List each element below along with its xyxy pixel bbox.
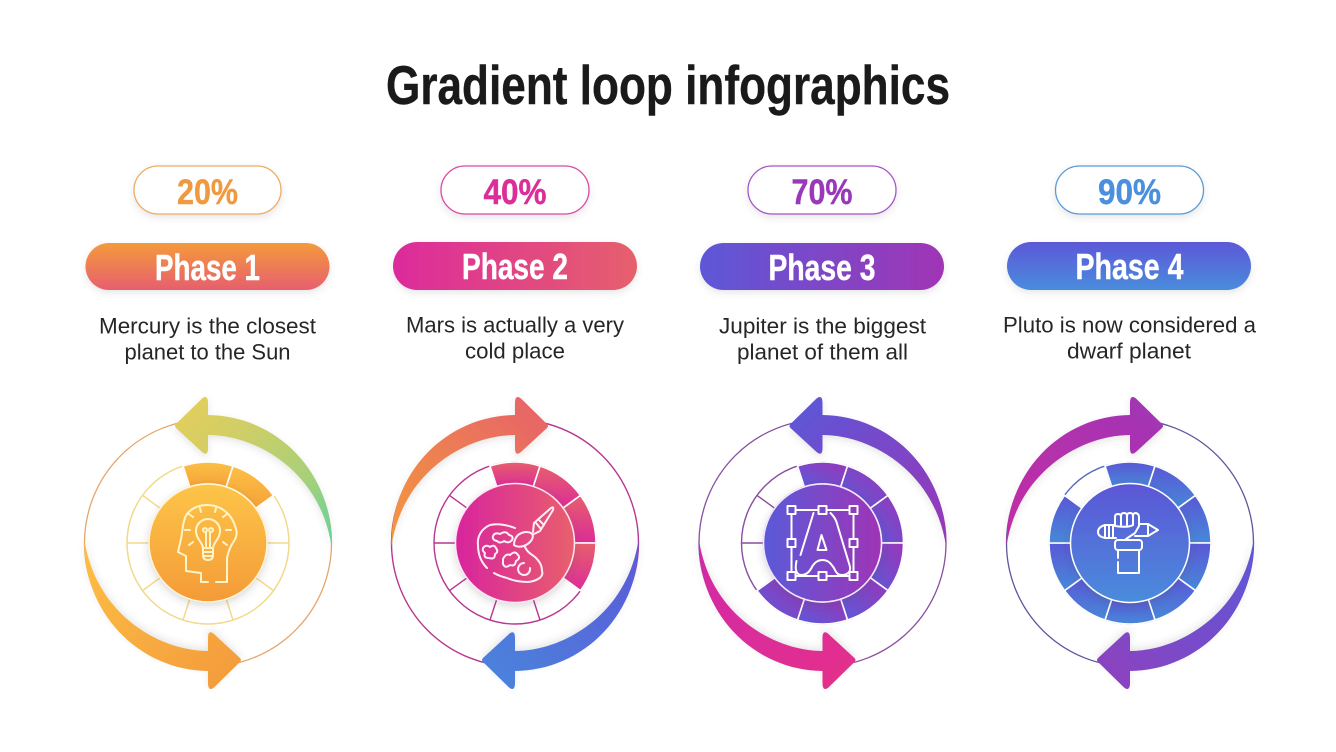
center disc (1070, 484, 1190, 602)
description: cold place (465, 338, 565, 364)
description (99, 314, 316, 364)
phase banner: Phase 2 (393, 242, 637, 290)
description (1003, 312, 1257, 364)
icon: fist holding pencil (1098, 513, 1158, 573)
phase banner: Phase 4: Phase 4 (1076, 246, 1184, 287)
percentage pill: 20% (134, 166, 281, 214)
phase banner: Phase 3: Phase 3 (768, 247, 876, 288)
phase banner: Phase 2: Phase 2 (462, 246, 568, 287)
description: Mercury is the closest (99, 314, 316, 338)
segmented progress ring (127, 462, 289, 624)
center disc (456, 484, 574, 602)
percentage pill: 90% (1056, 166, 1204, 214)
description (719, 314, 926, 364)
phase banner: Phase 1 (86, 243, 330, 290)
segmented progress ring (742, 462, 904, 624)
loop diagram: 20% progress (84, 397, 332, 689)
phase banner: Phase 4 (1007, 242, 1251, 290)
percentage pill: 40%: 40% (484, 173, 546, 212)
loop diagram: 90% progress (1006, 397, 1254, 689)
loop diagram: 70% progress (699, 397, 946, 689)
percentage pill: 40% (441, 166, 589, 214)
percentage pill: 70%: 70% (792, 173, 852, 212)
phase banner: Phase 3 (700, 243, 944, 290)
arrow: top loop arrow (790, 397, 946, 546)
percentage pill: 90%: 90% (1098, 173, 1161, 212)
center disc (764, 484, 882, 602)
center disc (149, 484, 267, 602)
arrow: top loop arrow (391, 397, 548, 546)
panel: phase 1 (84, 166, 332, 689)
panel: phase 4 (1003, 166, 1257, 689)
loop diagram: 40% progress (391, 397, 639, 689)
arrow: bottom loop arrow (84, 540, 241, 689)
arrow: top loop arrow (1006, 397, 1163, 546)
icon: letter A with bounding box (788, 506, 858, 580)
percentage pill: 20%: 20% (177, 173, 238, 212)
description: planet of them all (737, 340, 908, 364)
description: planet to the Sun (124, 340, 290, 364)
description: Jupiter is the biggest (719, 314, 926, 338)
description: Mars is actually a very (406, 312, 624, 338)
arrow: bottom loop arrow (482, 540, 639, 689)
description: dwarf planet (1067, 338, 1191, 364)
panel: phase 2 (391, 166, 639, 689)
phase banner: Phase 1: Phase 1 (155, 247, 260, 288)
icon: palette and brush (478, 507, 553, 582)
arrow: bottom loop arrow (699, 540, 856, 689)
panel: phase 3 (699, 166, 946, 689)
arrow: top loop arrow (175, 397, 332, 546)
arrow: bottom loop arrow (1097, 540, 1254, 689)
segmented progress ring (434, 462, 596, 624)
icon: head with light bulb (178, 505, 237, 582)
title: Gradient loop infographics (386, 54, 950, 116)
segmented progress ring (1049, 462, 1211, 624)
percentage pill: 70% (748, 166, 896, 214)
description: Pluto is now considered a (1003, 312, 1257, 338)
description (406, 312, 624, 364)
